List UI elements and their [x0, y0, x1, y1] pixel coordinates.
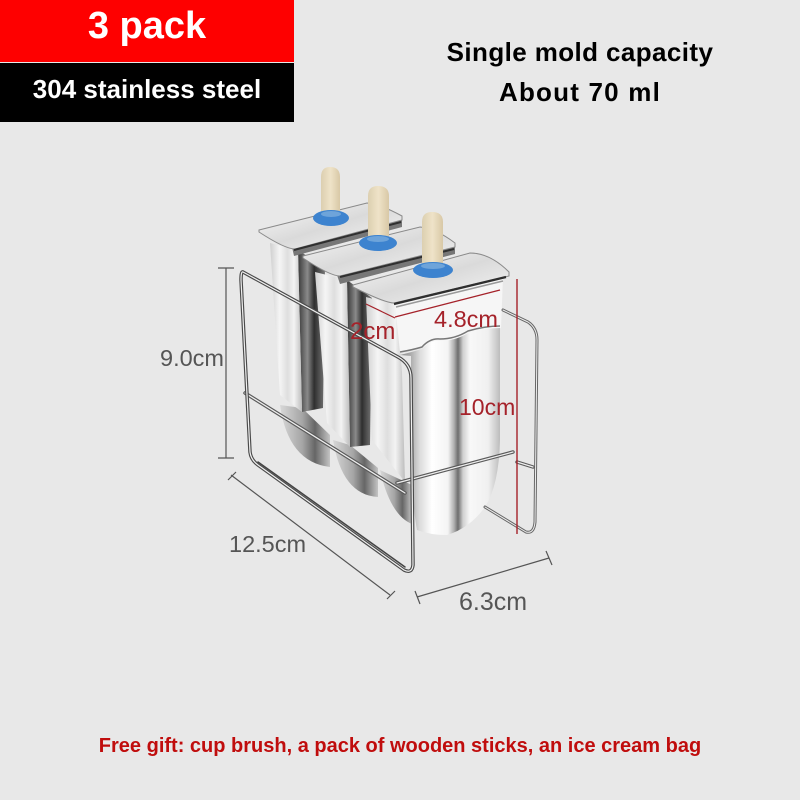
icon: wooden stick back [321, 167, 340, 215]
dimension: mold width 4.8cm: 4.8cm [434, 306, 498, 332]
icon: wooden stick middle [368, 186, 389, 240]
icon: blue ring back [313, 210, 349, 226]
dimension: height 9.0cm [160, 268, 234, 458]
dimension: length 12.5cm [228, 472, 395, 599]
dimension: mold depth 2cm: 2cm [350, 318, 395, 345]
icon: blue ring front [413, 262, 453, 278]
badge: 304 stainless steel [0, 63, 294, 122]
icon: wooden stick front [422, 212, 443, 268]
dimension: mold width 4.8cm [395, 290, 500, 332]
dimension: mold depth 2cm [350, 304, 395, 345]
dimension: width 6.3cm: 6.3cm [459, 588, 527, 616]
dimension: height 9.0cm: 9.0cm [160, 345, 224, 371]
heading: single mold capacity: About 70 ml [499, 77, 661, 107]
dimension: mold height 10cm: 10cm [459, 394, 515, 420]
icon: blue ring middle [359, 235, 397, 251]
middle mold [303, 186, 455, 497]
badge: 3 pack: 3 pack [88, 5, 206, 47]
dimension: width 6.3cm [415, 551, 552, 616]
badge: 304 stainless steel: 304 stainless steel [33, 74, 261, 104]
dimension: length 12.5cm: 12.5cm [229, 531, 306, 557]
heading: single mold capacity [447, 37, 713, 107]
footer: free gift note: Free gift: cup brush, a pack of wooden sticks, an ice cream bag [99, 735, 701, 757]
badge: 3 pack [0, 0, 294, 62]
wire rack [241, 272, 537, 571]
front mold [353, 212, 509, 535]
back mold [259, 167, 402, 467]
heading: single mold capacity: Single mold capacity [447, 37, 713, 67]
